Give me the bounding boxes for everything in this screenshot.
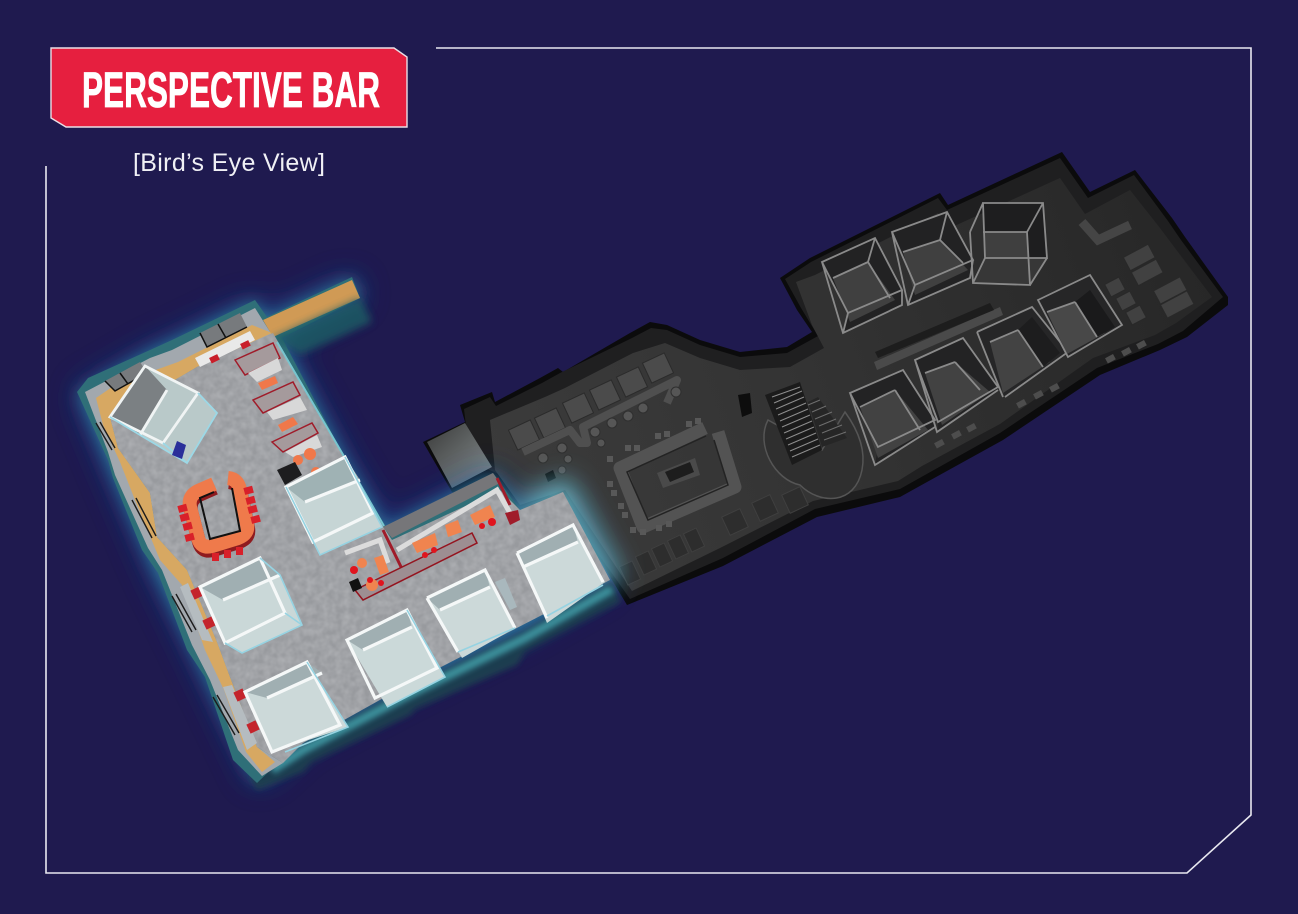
- central table: [657, 458, 700, 488]
- subtitle: [Bird’s Eye View]: [133, 149, 325, 177]
- right wall edge: [277, 342, 384, 526]
- interior walls: [428, 158, 1223, 599]
- glass room E: [427, 570, 515, 658]
- dim glass room K: [850, 370, 935, 465]
- red wall chairs: [190, 586, 260, 734]
- conference chairs: [177, 486, 261, 561]
- left window units: [96, 422, 239, 735]
- booths near window: [619, 487, 808, 585]
- title: PERSPECTIVE BAR: [82, 62, 380, 118]
- dim glass room I: [892, 212, 973, 305]
- red divider: [383, 478, 510, 575]
- dim glass room H: [822, 238, 902, 333]
- glass room B: [286, 457, 382, 555]
- centre bench: [874, 303, 1003, 370]
- glass room F: [517, 525, 605, 623]
- floor plan: dimmed bar section: [423, 152, 1228, 605]
- railing: [355, 510, 520, 600]
- pillar: [738, 393, 752, 417]
- small side room: [427, 423, 492, 488]
- black stand: [349, 578, 362, 592]
- banquette: [523, 380, 677, 452]
- dim glass room J: [970, 203, 1047, 285]
- black counter: [277, 462, 302, 485]
- left banquettes: [180, 583, 257, 750]
- exterior bottom band: [250, 582, 620, 790]
- corridor shadow: [273, 298, 372, 355]
- bar inner edge: [627, 436, 728, 520]
- floor plan: highlighted section: [77, 277, 620, 790]
- title banner: [51, 48, 407, 127]
- seating row: [508, 353, 674, 450]
- staircase: [765, 382, 847, 465]
- far end seating: [1105, 244, 1194, 325]
- tan wall band: [96, 325, 275, 772]
- glass room G: [245, 662, 348, 752]
- central bar ring: [620, 428, 735, 527]
- right arm tables: [357, 505, 495, 591]
- glass room C: [200, 558, 302, 653]
- outer wall band: [77, 277, 608, 783]
- right arm back wall: [383, 473, 500, 538]
- dim glass room N: [1038, 275, 1122, 357]
- dim floor: [490, 178, 1212, 591]
- outer walls: [423, 152, 1228, 605]
- glow around lit section: [77, 277, 612, 785]
- dim glass room L: [915, 338, 998, 432]
- right arm red stools: [350, 518, 496, 586]
- window tables: [934, 340, 1147, 449]
- exterior bottom edge glow: [272, 589, 612, 770]
- corridor: [263, 280, 360, 337]
- side panel: [495, 578, 517, 610]
- right arm banquette: [345, 490, 510, 563]
- glass room D: [347, 610, 445, 707]
- round tables: [538, 387, 681, 474]
- curved platform: [764, 412, 863, 499]
- top window units: [105, 313, 255, 391]
- grey carpet: [110, 333, 610, 763]
- bar stools: [607, 418, 701, 535]
- top arm booths: [235, 343, 322, 457]
- black stand: [545, 470, 556, 482]
- conference table: [190, 478, 248, 551]
- left and top wall base: [85, 308, 283, 776]
- carpet texture: [110, 333, 610, 763]
- far end bar: [1082, 222, 1130, 240]
- glass room A: [110, 366, 217, 463]
- top arm round tables: [293, 448, 321, 477]
- dim glass room M: [977, 307, 1068, 397]
